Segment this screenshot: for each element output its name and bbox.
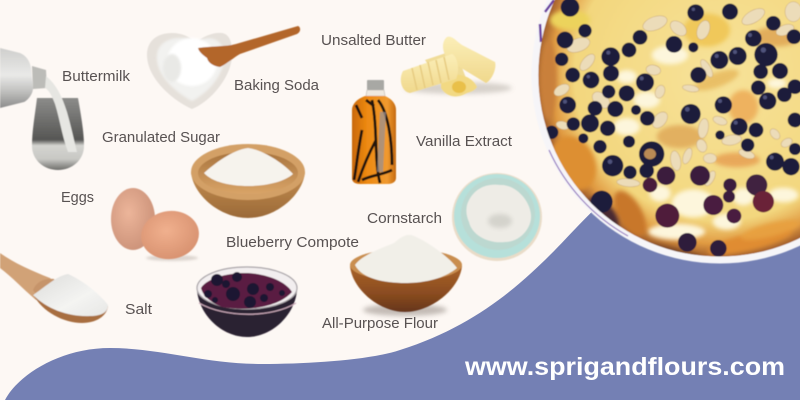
label: Blueberry Compote: Blueberry Compote [226,235,359,251]
milk stream [45,76,77,152]
ingredient: all-purpose flour bowl [350,235,462,316]
ingredient: blueberry compote glass bowl [197,267,297,337]
ingredient: eggs [111,188,202,263]
ingredient: butter curls [401,37,512,96]
label: Buttermilk: Buttermilk [62,69,131,85]
tart crust browning [540,10,800,263]
label: Granulated Sugar: Granulated Sugar [102,130,220,146]
ingredient: cornstarch on teal plate [452,173,542,261]
ingredient: buttermilk [0,48,84,170]
tart berry highlights [563,8,774,164]
ingredient: salt on wooden spoon [0,253,108,323]
blue wave banner [0,200,800,400]
buttermilk jug [0,48,33,108]
label: Baking Soda: Baking Soda [234,78,320,94]
wooden spoon [198,26,300,67]
website URL: www.sprigandflours.com [464,353,785,381]
tart blueberries [545,0,800,257]
ingredient: granulated sugar bowl [191,144,305,218]
label: Unsalted Butter: Unsalted Butter [321,33,426,49]
tart berry centre [644,149,656,159]
ingredient: vanilla extract bottle [352,80,396,184]
tart almonds [552,2,800,188]
label: Cornstarch: Cornstarch [367,211,442,227]
buttermilk cap [32,66,47,89]
tart custard patches [613,46,798,240]
buttermilk glass [32,98,84,170]
label: Salt: Salt [125,302,152,318]
label: Eggs: Eggs [61,190,94,206]
label: Vanilla Extract: Vanilla Extract [416,134,512,150]
ingredient: baking soda heart bowl [147,26,300,109]
label: All-Purpose Flour: All-Purpose Flour [322,316,438,332]
icon: blueberry tart in dish [532,0,800,264]
